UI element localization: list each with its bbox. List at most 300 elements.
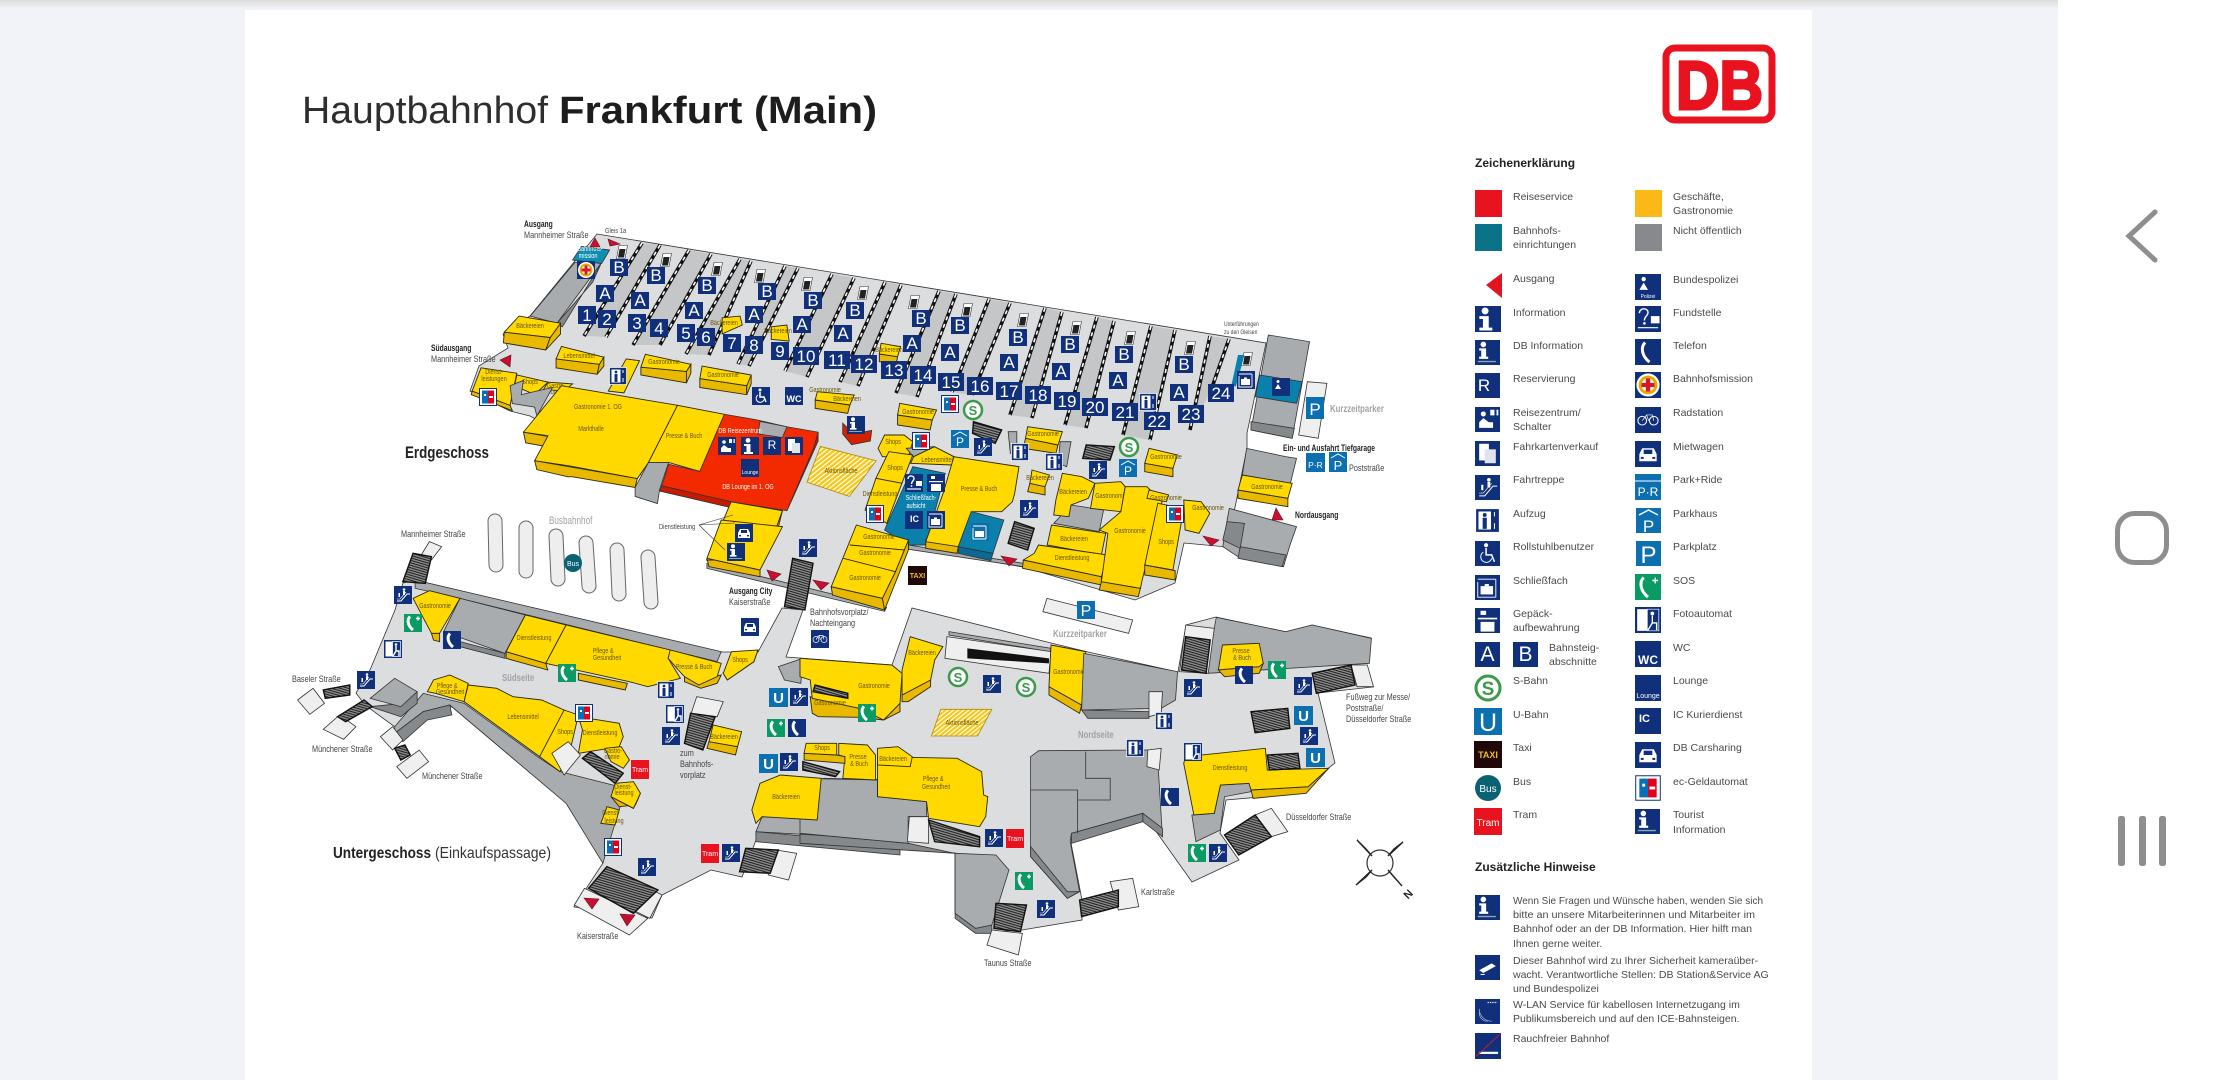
track numbers 1 to 9: 8 (749, 336, 759, 355)
legend: SOS (1635, 574, 1695, 600)
label: underground garage: Ein- und Ausfahrt Tiefgarage (1283, 443, 1375, 453)
platform B signs (610, 258, 1193, 374)
icon: escalator (662, 727, 680, 745)
block: Dienstleistung (578, 717, 623, 753)
title: Hauptbahnhof (302, 90, 548, 132)
block: Dienstleistung front (1251, 768, 1329, 798)
lift shaft centre (1147, 748, 1161, 770)
block: Gastronomie Poststraße (1238, 475, 1292, 507)
platform B signs: B (650, 266, 662, 285)
label: Fußweg zur Messe: Poststraße/ (1346, 702, 1384, 713)
icon: lift (657, 681, 675, 699)
icon: escalator (1037, 900, 1055, 918)
block: Nordausgang grey (1223, 508, 1297, 567)
heading: Untergeschoss (333, 845, 551, 862)
icon: parking garage: P (1124, 464, 1132, 478)
note: W-LAN: W-LAN Service für kabellosen Internetzugang im (1513, 999, 1740, 1011)
icon: S-Bahn: S (1022, 680, 1031, 695)
track numbers 10 to 24: 19 (1058, 392, 1076, 411)
label: exit Mannheimer Straße: Ausgang (524, 219, 553, 229)
block: Dienstleistung with icons (659, 502, 782, 577)
heading: Untergeschoss: (Einkaufspassage) (435, 845, 551, 862)
icon: wheelchair (752, 387, 770, 405)
legend: ec-Geldautomat (1636, 776, 1748, 800)
block: Aufzug yellow (608, 359, 640, 393)
track numbers 10 to 24: 20 (1086, 398, 1104, 417)
legend: DB Information: DB Information (1513, 340, 1583, 352)
track numbers 10 to 24 (793, 347, 1234, 431)
icon: parking (1306, 397, 1324, 419)
block: Markthalle front (523, 432, 548, 446)
legend: Geschäfte, Gastronomie: Gastronomie (1673, 205, 1733, 217)
block: Lebensmittel: Lebensmittel (507, 713, 539, 721)
non-public grey north (1082, 653, 1178, 718)
block: Markthalle (523, 386, 678, 479)
legend: IC Kurierdienst: IC (1639, 713, 1650, 725)
block: Gastronomie Bäckereien: Bäckereien (833, 395, 861, 403)
block: DB Reisezentrum and Lounge: DB Reisezentrum (718, 427, 762, 435)
block: Gastronomie (898, 403, 937, 430)
front kerb west (707, 563, 887, 611)
platform B signs: B (613, 258, 625, 277)
icon: U-Bahn: U (773, 690, 784, 707)
legend: Rollstuhlbenutzer (1475, 541, 1595, 566)
icon: lift (1155, 712, 1173, 730)
note: staff help: Wenn Sie Fragen und Wünsche haben, wenden Sie sich (1513, 895, 1763, 907)
legend: Park+Ride: Park+Ride (1673, 474, 1722, 486)
track numbers 10 to 24: 23 (1182, 405, 1200, 424)
note: staff help (1475, 895, 1763, 950)
icons ground floor (480, 261, 1347, 585)
block: Bäckereien (707, 725, 742, 755)
legend: Reiseservice: Reiseservice (1513, 191, 1573, 203)
block: DB Reisezentrum and Lounge: DB Lounge im 1. OG (722, 483, 774, 491)
grey centre block (1031, 750, 1162, 898)
block: Bäckereien (878, 747, 912, 767)
track numbers 1 to 9: 7 (727, 334, 737, 353)
legend: ec-Geldautomat: ec-Geldautomat (1673, 776, 1748, 788)
track numbers 10 to 24: 17 (1000, 382, 1018, 401)
note: camera surveillance: Dieser Bahnhof wird zu Ihrer Sicherheit kameraüber- (1513, 955, 1759, 967)
icon: escalator (780, 753, 798, 771)
track numbers 10 to 24: 18 (1029, 386, 1047, 405)
exit arrow near city exit (767, 570, 781, 581)
block: Aktionsfläche hatched (931, 709, 992, 736)
legend: Bahnsteigabschnitte: abschnitte (1549, 656, 1597, 668)
legend: Taxi (1474, 741, 1532, 768)
block: Gastronomie: Gastronomie (648, 358, 680, 366)
block: Lebensmittel (911, 447, 954, 465)
track beds (584, 243, 1229, 440)
label: Nordseite: Nordseite (1078, 729, 1114, 740)
legend: Telefon: Telefon (1673, 340, 1707, 352)
block: Aktionsfläche hatched (807, 446, 876, 496)
icon: lift (609, 367, 627, 385)
non-public grey south (444, 598, 525, 658)
grey wing left (395, 693, 621, 863)
block: Bäckereien (902, 637, 943, 702)
icon: Tram (631, 760, 649, 779)
icon: SOS (1188, 844, 1206, 862)
note: camera surveillance: und Bundespolizei (1513, 983, 1599, 995)
label: exit City: Ausgang City (729, 586, 773, 596)
legend: Rollstuhlbenutzer: Rollstuhlbenutzer (1513, 541, 1595, 553)
escalator: U-Bahn north 2 (1267, 753, 1300, 770)
block: Pflege & Gesundheit: Gesundheit (922, 783, 950, 791)
icon: reservation: R (768, 438, 777, 452)
wall strip Südseite (415, 580, 721, 662)
label: Bahnhofsvorplatz: Bahnhofsvorplatz/ (810, 606, 869, 617)
non-public grey by ec (906, 447, 939, 457)
legend: IC Kurierdienst: IC Kurierdienst (1673, 709, 1743, 721)
escalator: U-Bahn 1 (813, 685, 848, 698)
icon: SOS (767, 719, 785, 737)
legend: Bundespolizei (1635, 274, 1738, 300)
block: Gastronomie triple: Gastronomie (859, 549, 891, 557)
legend: Fotoautomat: Fotoautomat (1673, 608, 1732, 620)
icon: IC courier: IC (910, 514, 920, 524)
block: Pflege & Gesundheit: Gesundheit (436, 688, 464, 696)
icon: luggage storage (927, 474, 945, 492)
block: Bahnhofseinrichtungen blue (885, 467, 945, 545)
block: Dienstleistung: Dienstleistung (1055, 554, 1090, 562)
block: Presse & Buch (839, 743, 876, 780)
block: Presse & Buch (926, 457, 1019, 547)
label: exit Mannheimer Straße: Mannheimer Straße (524, 229, 589, 240)
icon: police (1272, 378, 1290, 396)
icon: Taxi: TAXI (910, 573, 925, 580)
block: Gastronomie (1091, 482, 1127, 512)
icon: parking garage: P (1334, 458, 1342, 473)
legend: Park+Ride (1635, 474, 1722, 500)
icon: U-Bahn (1306, 748, 1325, 767)
legend: S-Bahn: S (1482, 679, 1494, 700)
block: Shops: Shops (1158, 538, 1175, 546)
legend: Bahnhofseinrichtungen (1475, 224, 1576, 251)
icon: SOS (558, 664, 576, 682)
block: Gastronomie sliver (1147, 490, 1182, 502)
legend: DB Carsharing: DB Carsharing (1673, 742, 1742, 754)
icon: Bus (564, 554, 582, 572)
icon: Tram: Tram (1007, 836, 1023, 843)
block: Shops (723, 650, 758, 680)
platform B signs: B (915, 309, 927, 328)
icon: escalator (638, 858, 656, 876)
icon: escalator (1294, 677, 1312, 695)
panel: lower floor map (Untergeschoss) (292, 528, 1412, 968)
panel: legend (1474, 156, 1753, 836)
label: south exit (431, 343, 496, 364)
block: Shops (515, 375, 548, 395)
legend: Tram: Tram (1513, 809, 1537, 821)
block: Aktionsfläche hatched: Aktionsfläche (825, 467, 858, 475)
block: Dienstleistungen: Dienst- (485, 368, 503, 376)
block: Presse & Buch: Presse & Buch (676, 663, 713, 671)
icon: Lounge (741, 459, 759, 477)
icon: Tram: Tram (632, 767, 648, 774)
icon: lift (1011, 443, 1029, 461)
block: Gastronomie small: nomie (605, 753, 620, 761)
ground floor surface (470, 234, 1266, 610)
legend: Bundespolizei: Polizei (1641, 294, 1655, 300)
exit arrow: Kaiserstraße right (620, 914, 635, 926)
browser top shadow (0, 0, 2058, 9)
legend: Nicht öffentlich (1635, 224, 1742, 251)
block: Shops 2 (876, 452, 913, 483)
block: Gastronomie with escalator (800, 658, 902, 720)
icon: SOS (1015, 872, 1033, 890)
label: zum Bahnhofsvorplatz: vorplatz (680, 769, 706, 780)
block: Bäckereien lower (1047, 525, 1106, 555)
legend: Taxi: Taxi (1513, 742, 1532, 754)
block: red side (787, 432, 818, 511)
icon: telephone (788, 719, 806, 737)
label: Bahnhofsvorplatz: Nachteingang (810, 617, 855, 628)
track numbers 10 to 24: 13 (885, 361, 903, 380)
note: camera surveillance: wacht. Verantwortliche Stellen: DB Station&Service AG (1512, 969, 1769, 981)
legend: Fahrtreppe: Fahrtreppe (1513, 474, 1565, 486)
block: Shops: Shops (522, 378, 539, 386)
block: small Bäckereien platform 6: Bäckereien (710, 319, 738, 327)
icon: lift (1139, 393, 1157, 411)
icon: escalator (722, 844, 740, 862)
compass (1356, 840, 1416, 902)
icon: escalator (1184, 679, 1202, 697)
label: zum Bahnhofsvorplatz: zum (680, 747, 694, 758)
DB logo: DB (1676, 47, 1763, 124)
label: Kurzzeitparker: Kurzzeitparker (1330, 403, 1384, 414)
legend: WC (1635, 641, 1691, 667)
legend: Parkplatz: P (1640, 542, 1657, 569)
platform B signs: B (761, 282, 773, 301)
block: Gastronomie right (1145, 448, 1182, 477)
platform A signs: A (837, 324, 849, 343)
note: staff help: bitte an unsere Mitarbeiterinnen und Mitarbeiter im (1513, 909, 1755, 921)
legend: U-Bahn: U (1479, 709, 1497, 737)
block: Gastronomie (641, 354, 691, 383)
label: Kaiserstraße: Kaiserstraße (577, 930, 619, 941)
label: Gleis 1a: Gleis 1a (605, 227, 626, 235)
lift shaft (1058, 442, 1071, 467)
label: underground garage (1283, 443, 1385, 473)
icon: photo booth (1184, 743, 1202, 761)
note: staff help: Bahnhof oder an der DB Information. Hier hilft man (1513, 923, 1752, 935)
icon: lockers (1237, 371, 1255, 389)
block: Aktionsfläche hatched: Aktionsfläche (946, 719, 979, 727)
legend: Aufzug (1475, 508, 1546, 533)
legend: Fahrkartenverkauf (1475, 441, 1598, 466)
icon: Taxi (908, 566, 927, 585)
icon: lockers (927, 511, 945, 529)
block: Dienstleistung small: leistung (605, 817, 624, 825)
block: Pflege & Gesundheit: Pflege & (923, 775, 944, 783)
track numbers 10 to 24: 15 (942, 373, 960, 392)
legend: Telefon (1635, 339, 1707, 365)
icon: rental car (735, 524, 753, 542)
icon: ec (576, 704, 592, 722)
block: Dienstleistung: Dienstleistung (583, 729, 618, 737)
legend: Bahnsteigabschnitte: Bahnsteig- (1549, 642, 1600, 654)
icon: escalator (1300, 727, 1318, 745)
block: Presse & Buch: Presse (849, 753, 867, 761)
block: Pflege & Gesundheit (878, 757, 988, 827)
block: Gastronomie corner: Gastronomie (1192, 504, 1224, 512)
legend: Lounge: Lounge (1636, 693, 1660, 700)
block: Gastronomie Bäckereien: Gastronomie (809, 386, 841, 394)
heading: Erdgeschoss: Erdgeschoss (405, 443, 489, 462)
icon: parking Kurzzeitparker lower: P (1081, 603, 1091, 620)
icon: S-Bahn: S (954, 670, 963, 685)
icon: information (741, 437, 759, 455)
icon: S-Bahn: S (969, 403, 978, 418)
track numbers 10 to 24: 14 (914, 366, 932, 385)
legend: IC Kurierdienst (1635, 708, 1743, 734)
block: Dienstleistungen: leistungen (481, 375, 507, 383)
panel: ground floor map (Erdgeschoss) (405, 219, 1385, 611)
block: Dienstleistung small (611, 782, 640, 808)
grey block Baseler (370, 678, 417, 717)
block: small Gastronomie: Gastro- (547, 382, 565, 390)
block: big Gastronomie (1099, 487, 1162, 588)
legend: Reisezentrum/Schalter: Reisezentrum/ (1513, 407, 1581, 419)
note: camera surveillance (1475, 955, 1769, 995)
icon: telephone (1161, 788, 1179, 806)
icon: parking garage (1329, 452, 1347, 473)
block: Gastronomie on concourse (1023, 427, 1062, 453)
block: Pflege & Gesundheit: Pflege & (437, 682, 458, 690)
icon: U-Bahn (1294, 706, 1313, 725)
stairway: zum Bahnhofsvorplatz (684, 697, 723, 750)
block: non-public grey (635, 462, 669, 504)
legend: S-Bahn (1476, 675, 1548, 700)
parking strip short-stay (1299, 382, 1327, 438)
icon: Bahnhofsmission (577, 261, 595, 279)
block: Bahnhofseinrichtungen blue: aufsicht (906, 502, 926, 510)
stairway: Karlstraße (1080, 878, 1139, 917)
label: underpass (1224, 322, 1259, 336)
legend: Information: Information (1513, 307, 1566, 319)
label: exit City: Kaiserstraße (729, 596, 771, 607)
lift shaft north (1149, 692, 1162, 717)
label: Südseite: Südseite (502, 672, 534, 683)
platform B signs: B (1118, 345, 1130, 364)
block: Gastronomie: Gastronomie (902, 408, 934, 416)
block: Lebensmittel (464, 685, 564, 757)
block: DB Reisezentrum and Lounge (662, 414, 818, 511)
track numbers 10 to 24: 24 (1212, 384, 1230, 403)
note: W-LAN (1475, 999, 1740, 1025)
icon: home button (2118, 514, 2166, 562)
block: Dienstleistung: Dienstleistung (863, 490, 898, 498)
legend: DB Information (1475, 340, 1583, 365)
block: Gastronomie (413, 591, 460, 642)
icon: escalator (790, 688, 808, 706)
block: non-public stairs (510, 380, 553, 416)
track numbers 10 to 24: 12 (855, 355, 873, 374)
block: small Bäckereien platform 8 (764, 325, 792, 341)
track numbers 10 to 24: 16 (971, 377, 989, 396)
block: Bäckereien lower: Bäckereien (1060, 535, 1088, 543)
label: Münchener Straße: Münchener Straße (422, 770, 483, 781)
grey bottom left (955, 853, 1009, 933)
block: Bäckereien: Bäckereien (710, 733, 738, 741)
label: exit Mannheimer Straße (524, 219, 589, 240)
compass: N (1402, 888, 1416, 902)
block: red information stand (843, 423, 872, 445)
platform A signs: A (634, 291, 646, 310)
legend: Bahnhofseinrichtungen: einrichtungen (1513, 239, 1576, 251)
platform A signs: A (748, 305, 760, 324)
icon: ec (866, 506, 884, 522)
block: Bäckereien small (1026, 470, 1054, 495)
block: Gastronomie sliver: Gastronomie (1150, 494, 1182, 502)
icon: parking garage (1119, 459, 1137, 478)
label: exit City (729, 586, 773, 607)
legend: Lounge (1635, 675, 1708, 701)
block: Presse & Buch (648, 405, 724, 471)
icon: U-Bahn: U (1298, 708, 1309, 725)
heading: Zeichenerklärung: Zeichenerklärung (1475, 156, 1575, 170)
stairway: Mannheimer Straße (403, 542, 442, 583)
block: Dienstleistung small: leistung (615, 789, 634, 797)
icon: bicycle station (811, 630, 829, 648)
label: Karlstraße: Karlstraße (1141, 886, 1175, 897)
block: Markthalle: Markthalle (578, 425, 604, 433)
legend: Nicht öffentlich: Nicht öffentlich (1673, 225, 1742, 237)
icon: S-Bahn: S (1125, 440, 1134, 455)
block: Gastronomie right: Gastronomie (1150, 453, 1182, 461)
block: Gastronomie Nordseite (1049, 645, 1086, 713)
platform stair icons (616, 246, 1252, 366)
legend: Fahrkartenverkauf: Fahrkartenverkauf (1513, 441, 1598, 453)
white stairs box north (1180, 625, 1214, 673)
icon: parking garage (951, 430, 969, 449)
legend: Gepäckaufbewahrung: Gepäck- (1513, 608, 1553, 620)
label: Fußweg zur Messe: Fußweg zur Messe/ (1346, 691, 1411, 702)
block: Gastronomie (700, 366, 751, 395)
label: Düsseldorfer Straße: Düsseldorfer Straße (1286, 811, 1352, 822)
platform A signs: A (944, 343, 956, 362)
legend: S-Bahn: S-Bahn (1513, 675, 1548, 687)
escalator: U-Bahn north (1251, 708, 1290, 733)
note: smoke-free: Rauchfreier Bahnhof (1513, 1033, 1609, 1045)
block: Dienstleistung: Dienstleistung (1213, 764, 1248, 772)
icon: escalator (983, 675, 1001, 693)
icon: ec (1166, 506, 1184, 522)
stairway: Taunus Straße (987, 903, 1027, 955)
icon: ec (912, 432, 930, 450)
note: staff help: Ihnen gerne weiter. (1513, 938, 1602, 950)
label: Münchener Straße: Münchener Straße (312, 743, 373, 754)
icon: ec (480, 388, 496, 406)
stairway: north box (1182, 637, 1210, 673)
icon: Tram: Tram (702, 851, 718, 858)
block: teal sliver platform 24 (1231, 355, 1244, 387)
block: Markthalle front lower (535, 461, 637, 487)
platform A signs: A (688, 301, 700, 320)
icon: travel centre (718, 437, 736, 455)
block: Dienstleistungen (471, 368, 517, 411)
block: small Gastronomie (544, 382, 573, 396)
block: Markthalle: Gastronomie 1. OG (574, 403, 622, 411)
track numbers 1 to 9: 9 (775, 342, 785, 361)
block: Shops (804, 743, 845, 763)
icon: SOS (1268, 661, 1286, 679)
label: Taunus Straße: Taunus Straße (984, 957, 1032, 968)
block: Presse & Buch front (926, 540, 958, 553)
legend: Parkplatz (1636, 541, 1717, 569)
block: Dienstleistung small: Dienst- (614, 783, 632, 791)
